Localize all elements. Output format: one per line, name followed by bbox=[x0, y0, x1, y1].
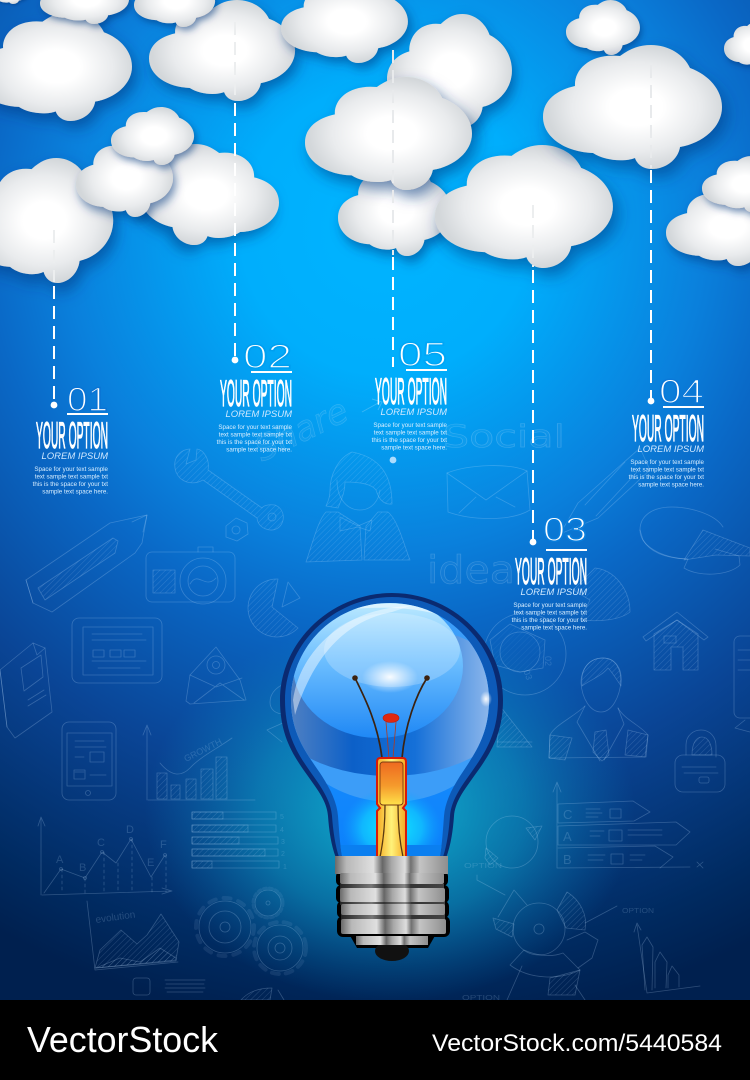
doodle: progress bars: 3 bbox=[281, 839, 285, 846]
text block 03: text sample text sample txt bbox=[514, 610, 587, 616]
text block 03: Space for your text sample bbox=[513, 602, 588, 609]
doodle: donut chart: 02 bbox=[543, 656, 553, 666]
connector 05 lower bbox=[392, 257, 394, 367]
footer brand: VectorStock bbox=[27, 1019, 219, 1060]
doodle: line chart A to F: E bbox=[147, 857, 154, 869]
cloud: lower center bbox=[435, 145, 613, 268]
doodle: left of bulb shapes bbox=[267, 683, 290, 742]
doodle: idea text: idea bbox=[427, 548, 515, 592]
option 02 bbox=[217, 338, 293, 454]
cloud: far right top bbox=[724, 22, 750, 68]
doodle: arrow bar chart: B bbox=[563, 852, 572, 867]
filament stem bbox=[377, 758, 406, 857]
bulb screw base bbox=[335, 856, 450, 961]
cloud: middle front bbox=[305, 77, 472, 190]
number 02: 02 bbox=[243, 338, 292, 376]
text block 02: text sample text sample txt bbox=[219, 432, 292, 438]
sketch doodles background bbox=[0, 391, 750, 1002]
cloud: top right large bbox=[543, 45, 722, 169]
doodle: line chart A to F: A bbox=[56, 854, 64, 866]
doodle: camera bbox=[146, 547, 235, 604]
footer bar bbox=[0, 1000, 750, 1080]
text: YOUR OPTION bbox=[36, 415, 108, 456]
bulb glass bbox=[280, 593, 503, 856]
doodle: evolution area chart: evolution bbox=[95, 910, 136, 926]
doodle: right pencil bbox=[560, 448, 650, 534]
doodle: padlock bbox=[675, 730, 725, 792]
doodle: right edge phone bbox=[734, 636, 750, 732]
text block 04: this is the space for your txt bbox=[629, 474, 704, 481]
doodle: mail with at sign bbox=[186, 647, 246, 704]
text block 02: this is the space for your txt bbox=[217, 439, 292, 446]
text block 01: Space for your text sample bbox=[34, 466, 109, 473]
doodle: envelope bbox=[447, 466, 530, 518]
doodle: line chart A to F: C bbox=[97, 837, 105, 849]
text block 01 bbox=[33, 466, 109, 496]
sub heading 03: LOREM IPSUM bbox=[520, 587, 587, 598]
sub heading 04: LOREM IPSUM bbox=[637, 444, 704, 455]
dashed connector lines bbox=[51, 22, 654, 545]
doodle: businessman avatar bbox=[549, 658, 648, 761]
text block 02: Space for your text sample bbox=[218, 424, 293, 431]
cloud: left center front bbox=[76, 139, 173, 217]
doodle: line chart A to F: B bbox=[79, 862, 86, 874]
option 05 bbox=[372, 336, 448, 452]
cloud: left center small bbox=[111, 107, 194, 165]
connector 04 bbox=[648, 65, 654, 404]
doodle: evolution area chart bbox=[87, 901, 179, 970]
text block 01: this is the space for your txt bbox=[33, 481, 108, 488]
doodle: tablet bbox=[72, 618, 162, 683]
number 04: 04 bbox=[659, 373, 704, 411]
doodle: 3D pie chart bbox=[640, 507, 750, 574]
number 05: 05 bbox=[398, 336, 447, 374]
doodle: donut chart: 03 bbox=[522, 668, 534, 681]
doodle: smartphone bbox=[62, 722, 116, 800]
cloud: middle rear upper bbox=[387, 14, 512, 127]
doodle: arch pie slice bbox=[573, 568, 630, 621]
text: YOUR OPTION bbox=[220, 373, 292, 414]
cloud: top center small bbox=[134, 0, 215, 27]
doodle: progress bars: 5 bbox=[280, 814, 284, 821]
text block 05: text sample text sample txt bbox=[374, 430, 447, 436]
number 01: 01 bbox=[67, 381, 108, 419]
sub heading 02: LOREM IPSUM bbox=[225, 409, 292, 420]
doodle: radial option chart: OPTION bbox=[462, 995, 500, 1002]
doodle: arrow bar chart bbox=[553, 782, 703, 868]
option 01 bbox=[33, 381, 109, 496]
cloud: top left corner bbox=[0, 0, 28, 4]
doodle: progress bars: 1 bbox=[283, 864, 287, 871]
text block 01: sample text space here. bbox=[42, 488, 108, 496]
doodle: donut chart bbox=[484, 613, 566, 695]
doodle: share text: Share bbox=[248, 391, 355, 470]
cloud: top center bbox=[281, 0, 408, 63]
text block 02 bbox=[217, 424, 293, 454]
text block 03: sample text space here. bbox=[521, 624, 587, 632]
cloud: left middle large bbox=[0, 158, 113, 283]
sub heading 05: LOREM IPSUM bbox=[380, 407, 447, 418]
connector 03 bbox=[530, 205, 536, 545]
option 04 bbox=[629, 373, 705, 488]
text block 05: this is the space for your txt bbox=[372, 437, 447, 444]
doodle: radial option chart: OPTION bbox=[464, 863, 502, 870]
light bulb bbox=[280, 593, 503, 961]
number 03: 03 bbox=[543, 511, 587, 549]
doodle: pie chart bbox=[248, 579, 300, 637]
doodle: growth bar chart: GROWTH bbox=[182, 736, 223, 764]
doodle: line chart A to F bbox=[38, 817, 172, 895]
cloud: top right small bbox=[566, 0, 640, 55]
doodle: small note bbox=[133, 978, 205, 995]
doodle: radial option chart: OPTION bbox=[622, 908, 654, 915]
filament wires bbox=[352, 675, 430, 758]
doodle: woman avatar bbox=[306, 452, 410, 562]
doodle: radial option chart bbox=[462, 863, 654, 1002]
footer reference: VectorStock.com/5440584 bbox=[432, 1030, 722, 1057]
connector 01 bbox=[51, 230, 57, 408]
doodle: line chart A to F: F bbox=[160, 839, 167, 851]
doodle: bottom pie fragment bbox=[241, 988, 284, 1000]
doodle: upward arrows chart bbox=[634, 923, 700, 993]
outline and threads bbox=[336, 871, 448, 886]
doodle: line chart A to F: D bbox=[126, 824, 134, 836]
doodle: arrow bar chart: C bbox=[563, 807, 572, 822]
text block 04: sample text space here. bbox=[638, 482, 704, 488]
doodle: house bbox=[643, 612, 708, 670]
doodle: social text: Social bbox=[443, 419, 565, 455]
text block 02: sample text space here. bbox=[226, 446, 292, 454]
text block 04 bbox=[629, 459, 705, 488]
doodle: ruler triangle bbox=[497, 706, 532, 747]
connector 02 bbox=[232, 22, 238, 363]
text block 04: Space for your text sample bbox=[630, 459, 705, 466]
sub heading 01: LOREM IPSUM bbox=[41, 451, 108, 462]
doodle: cycle arrows bbox=[485, 816, 542, 868]
cloud: right lower bbox=[666, 187, 750, 266]
text block 05 bbox=[372, 422, 448, 452]
doodle: gears bbox=[196, 888, 306, 974]
clouds bbox=[0, 0, 750, 283]
cloud: top left upper bbox=[40, 0, 129, 24]
cloud: top left large bbox=[0, 12, 132, 121]
cloud: left center rear bbox=[140, 144, 279, 245]
doodle: arrow bar chart: A bbox=[563, 829, 572, 844]
text block 04: text sample text sample txt bbox=[631, 466, 704, 474]
doodle: progress bars: 2 bbox=[281, 851, 285, 858]
cloud: center left large bbox=[149, 0, 295, 101]
text block 03: this is the space for your txt bbox=[512, 617, 587, 624]
cloud: middle rear lower bbox=[338, 165, 451, 256]
doodle: progress bars bbox=[192, 812, 287, 871]
text: YOUR OPTION bbox=[375, 371, 447, 412]
connector 05 bbox=[392, 50, 394, 255]
doodle: hex nut bbox=[226, 518, 248, 541]
doodle: book bbox=[0, 643, 52, 738]
text block 01: text sample text sample txt bbox=[35, 474, 108, 480]
doodle: progress bars: 4 bbox=[280, 827, 284, 834]
doodle: pencil bbox=[26, 515, 147, 612]
option 03 bbox=[512, 511, 588, 632]
doodle: growth bar chart bbox=[143, 725, 255, 800]
text block 03 bbox=[512, 602, 588, 632]
doodle: wrench bbox=[175, 449, 283, 530]
cloud: right small front bbox=[702, 156, 750, 212]
text block 05: sample text space here. bbox=[381, 444, 447, 452]
text block 05: Space for your text sample bbox=[373, 422, 448, 429]
